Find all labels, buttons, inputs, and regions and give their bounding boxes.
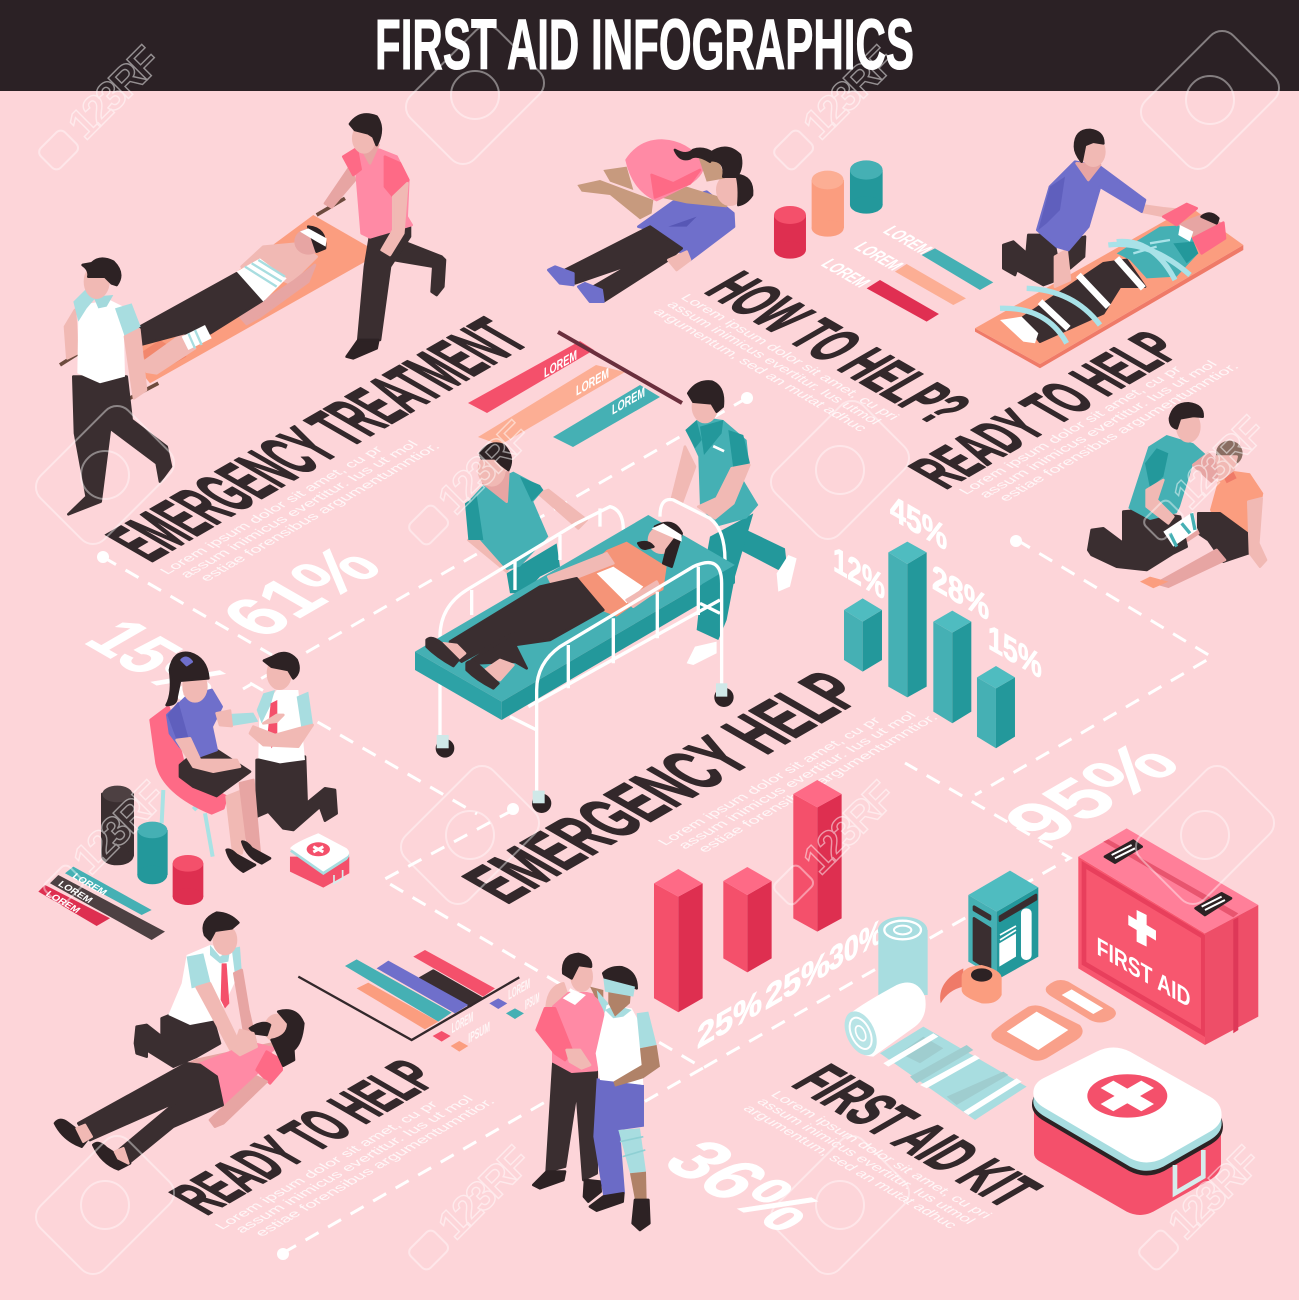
text block: emergency help bbox=[654, 696, 941, 863]
teal box bbox=[968, 871, 1038, 980]
watermark overlay: 123RF bbox=[64, 772, 175, 883]
illustration: man performing cpr on woman bbox=[55, 913, 303, 1169]
illustration: first aid kit items bbox=[838, 828, 1258, 1215]
text block: ready to help top right: Lorem ipsum dolor sit amet, cu pr bbox=[955, 363, 1185, 497]
right nurse bbox=[672, 381, 797, 665]
title bar: FIRST AID INFOGRAPHICS bbox=[375, 6, 914, 85]
red bar chart with percentages bbox=[654, 780, 883, 1056]
illustration: stretcher carried by two men bbox=[60, 115, 445, 514]
cylinders bbox=[102, 786, 203, 905]
chart: cylinders and lorem bars top: LOREM bbox=[816, 256, 875, 291]
chart: small bar chart with legend: IPSUM bbox=[468, 1018, 490, 1046]
watermark overlay: 123RF bbox=[1164, 407, 1275, 518]
teal bar chart with percentages: 12% bbox=[833, 539, 885, 608]
wheels bbox=[437, 683, 732, 812]
text block: ready to help bottom left bbox=[211, 1080, 498, 1246]
kneeling man bbox=[250, 653, 337, 830]
text block: ready to help top right: assum inimicus evertitur. Ius ut mol bbox=[975, 358, 1221, 500]
chart: small bar chart with legend bbox=[298, 950, 539, 1052]
text: EMERGENCY TREATMENT bbox=[89, 307, 546, 572]
chart: cylinders and lorem bars top: LOREM bbox=[878, 223, 937, 258]
text block: ready to help top right bbox=[955, 345, 1242, 512]
text block: ready to help top right: estiae forensibus argumentumntior. bbox=[995, 360, 1242, 504]
legend: lorem bars centre: LOREM bbox=[544, 346, 577, 381]
watermark overlay: 123RF bbox=[429, 1137, 540, 1248]
stat: 15%: 15% bbox=[68, 608, 248, 713]
small first aid kit bbox=[290, 833, 349, 888]
white first aid box bbox=[1033, 1047, 1222, 1215]
man in white with bandage bbox=[590, 967, 660, 1230]
watermark overlay: 123RF bbox=[794, 772, 905, 883]
text block: emergency treatment: estiae forensibus argumentumntior. bbox=[196, 440, 443, 584]
text block: emergency help: estiae forensibus argumentumntior. bbox=[694, 711, 941, 855]
man in pink bbox=[533, 954, 603, 1202]
briefcase: FIRST AID bbox=[1097, 932, 1190, 1014]
gurney near rail bbox=[510, 563, 722, 802]
red bar chart with percentages: 25% bbox=[765, 942, 830, 1017]
legend: lorem bars centre bbox=[468, 332, 682, 447]
lorem bars: LOREM bbox=[43, 890, 82, 915]
mattress bbox=[415, 515, 735, 702]
kneeling man cpr bbox=[135, 913, 257, 1067]
lorem bars bbox=[38, 867, 165, 940]
watermark overlay: 123RF bbox=[1159, 1137, 1270, 1248]
watermark overlay: 123RF bbox=[794, 37, 905, 148]
tape roll bbox=[940, 965, 1002, 1004]
gurney far rail bbox=[440, 500, 725, 740]
heading: ready to help bottom left: READY TO HELP bbox=[155, 1050, 454, 1223]
illustration: patient on board top right bbox=[975, 130, 1243, 368]
teal bar chart with percentages: 45% bbox=[890, 487, 947, 559]
text block: emergency help: Lorem ipsum dolor sit amet, cu pr bbox=[654, 714, 884, 848]
plasters bbox=[991, 980, 1116, 1061]
illustration: nurses with hospital gurney bbox=[415, 381, 797, 812]
legend: lorem bars centre: LOREM bbox=[612, 383, 645, 418]
teal bar chart with percentages: 28% bbox=[932, 557, 989, 629]
red bar chart with percentages: 30% bbox=[829, 911, 883, 979]
text block: how to help: argumentum, sed an mutat adhuc bbox=[650, 305, 871, 434]
chart: small bar chart with legend: LOREM bbox=[508, 974, 530, 1003]
text block: emergency treatment bbox=[156, 425, 443, 592]
text block: how to help: Lorem ipsum dolor sit amet, cu pri bbox=[677, 291, 903, 422]
text block: ready to help bottom left: assum inimicus evertitur. Ius ut mol bbox=[231, 1093, 477, 1235]
stat: 95%: 95% bbox=[984, 730, 1198, 855]
heading: emergency help: EMERGENCY HELP bbox=[445, 660, 883, 914]
patient bbox=[140, 227, 327, 373]
chart: cylinders and lorem bars top: LOREM bbox=[849, 239, 908, 274]
watermark overlay: 123RF bbox=[59, 37, 170, 148]
text block: ready to help bottom left: estiae forensibus argumentumntior. bbox=[251, 1095, 498, 1239]
chart: small bar chart with legend: LOREM bbox=[452, 1008, 473, 1036]
text block: first aid kit: assum inimicus evertitur. Ius utmol bbox=[754, 1095, 980, 1226]
red bar chart with percentages: 25% bbox=[697, 981, 762, 1056]
stat: 61%: 61% bbox=[203, 535, 400, 649]
patient on gurney bbox=[427, 523, 682, 688]
title bar bbox=[0, 0, 1299, 91]
illustration: helper bandaging boy's leg bbox=[1088, 403, 1266, 588]
stat: 36%: 36% bbox=[645, 1128, 843, 1243]
lorem bars: LOREM bbox=[56, 880, 94, 905]
illustration: woman on chair with kneeling man bbox=[38, 653, 349, 940]
briefcase bbox=[1078, 828, 1258, 1045]
text block: emergency treatment: assum inimicus evertitur. Ius ut mol bbox=[176, 438, 422, 580]
text block: first aid kit: Lorem ipsum dolor sit amet, cu pri bbox=[767, 1088, 996, 1221]
left nurse bbox=[465, 444, 587, 593]
seated woman bbox=[167, 653, 270, 872]
text block: ready to help bottom left: Lorem ipsum dolor sit amet, cu pr bbox=[211, 1098, 441, 1232]
text: IPSUM bbox=[525, 989, 539, 1013]
text block: emergency help: assum inimicus evertitur. Ius ut mol bbox=[674, 709, 920, 851]
teal bar chart with percentages bbox=[833, 487, 1042, 748]
right carrier bbox=[325, 115, 445, 358]
illustration: two women cpr top bbox=[548, 141, 752, 302]
bandage upright bbox=[878, 917, 928, 995]
text block: how to help bbox=[650, 290, 903, 437]
patient strapped bbox=[1000, 204, 1225, 343]
text block: first aid kit bbox=[740, 1087, 996, 1236]
heading: how to help: HOW TO HELP? bbox=[691, 262, 986, 433]
legend: lorem bars centre: LOREM bbox=[576, 364, 609, 399]
teal bar chart with percentages: 15% bbox=[988, 617, 1042, 687]
kneeling helper bbox=[1003, 130, 1180, 287]
text block: how to help: assum inimicus evertitur. Ius utmol bbox=[664, 298, 885, 427]
watermark overlay: 123RF bbox=[429, 412, 540, 523]
left carrier bbox=[65, 259, 171, 514]
chart: cylinders and lorem bars top bbox=[774, 160, 993, 322]
lying woman bbox=[55, 1011, 303, 1169]
lorem bars: LOREM bbox=[70, 872, 109, 897]
chair bbox=[151, 707, 227, 857]
illustration: two men, injured man supported bbox=[533, 954, 660, 1230]
dashed connector lines bbox=[97, 392, 1212, 1260]
text block: emergency treatment: Lorem ipsum dolor sit amet, cu pr bbox=[156, 443, 386, 577]
text block: first aid kit: argumentum, sed an mutat adhuc bbox=[740, 1102, 961, 1231]
unrolled bandage bbox=[838, 983, 1027, 1120]
